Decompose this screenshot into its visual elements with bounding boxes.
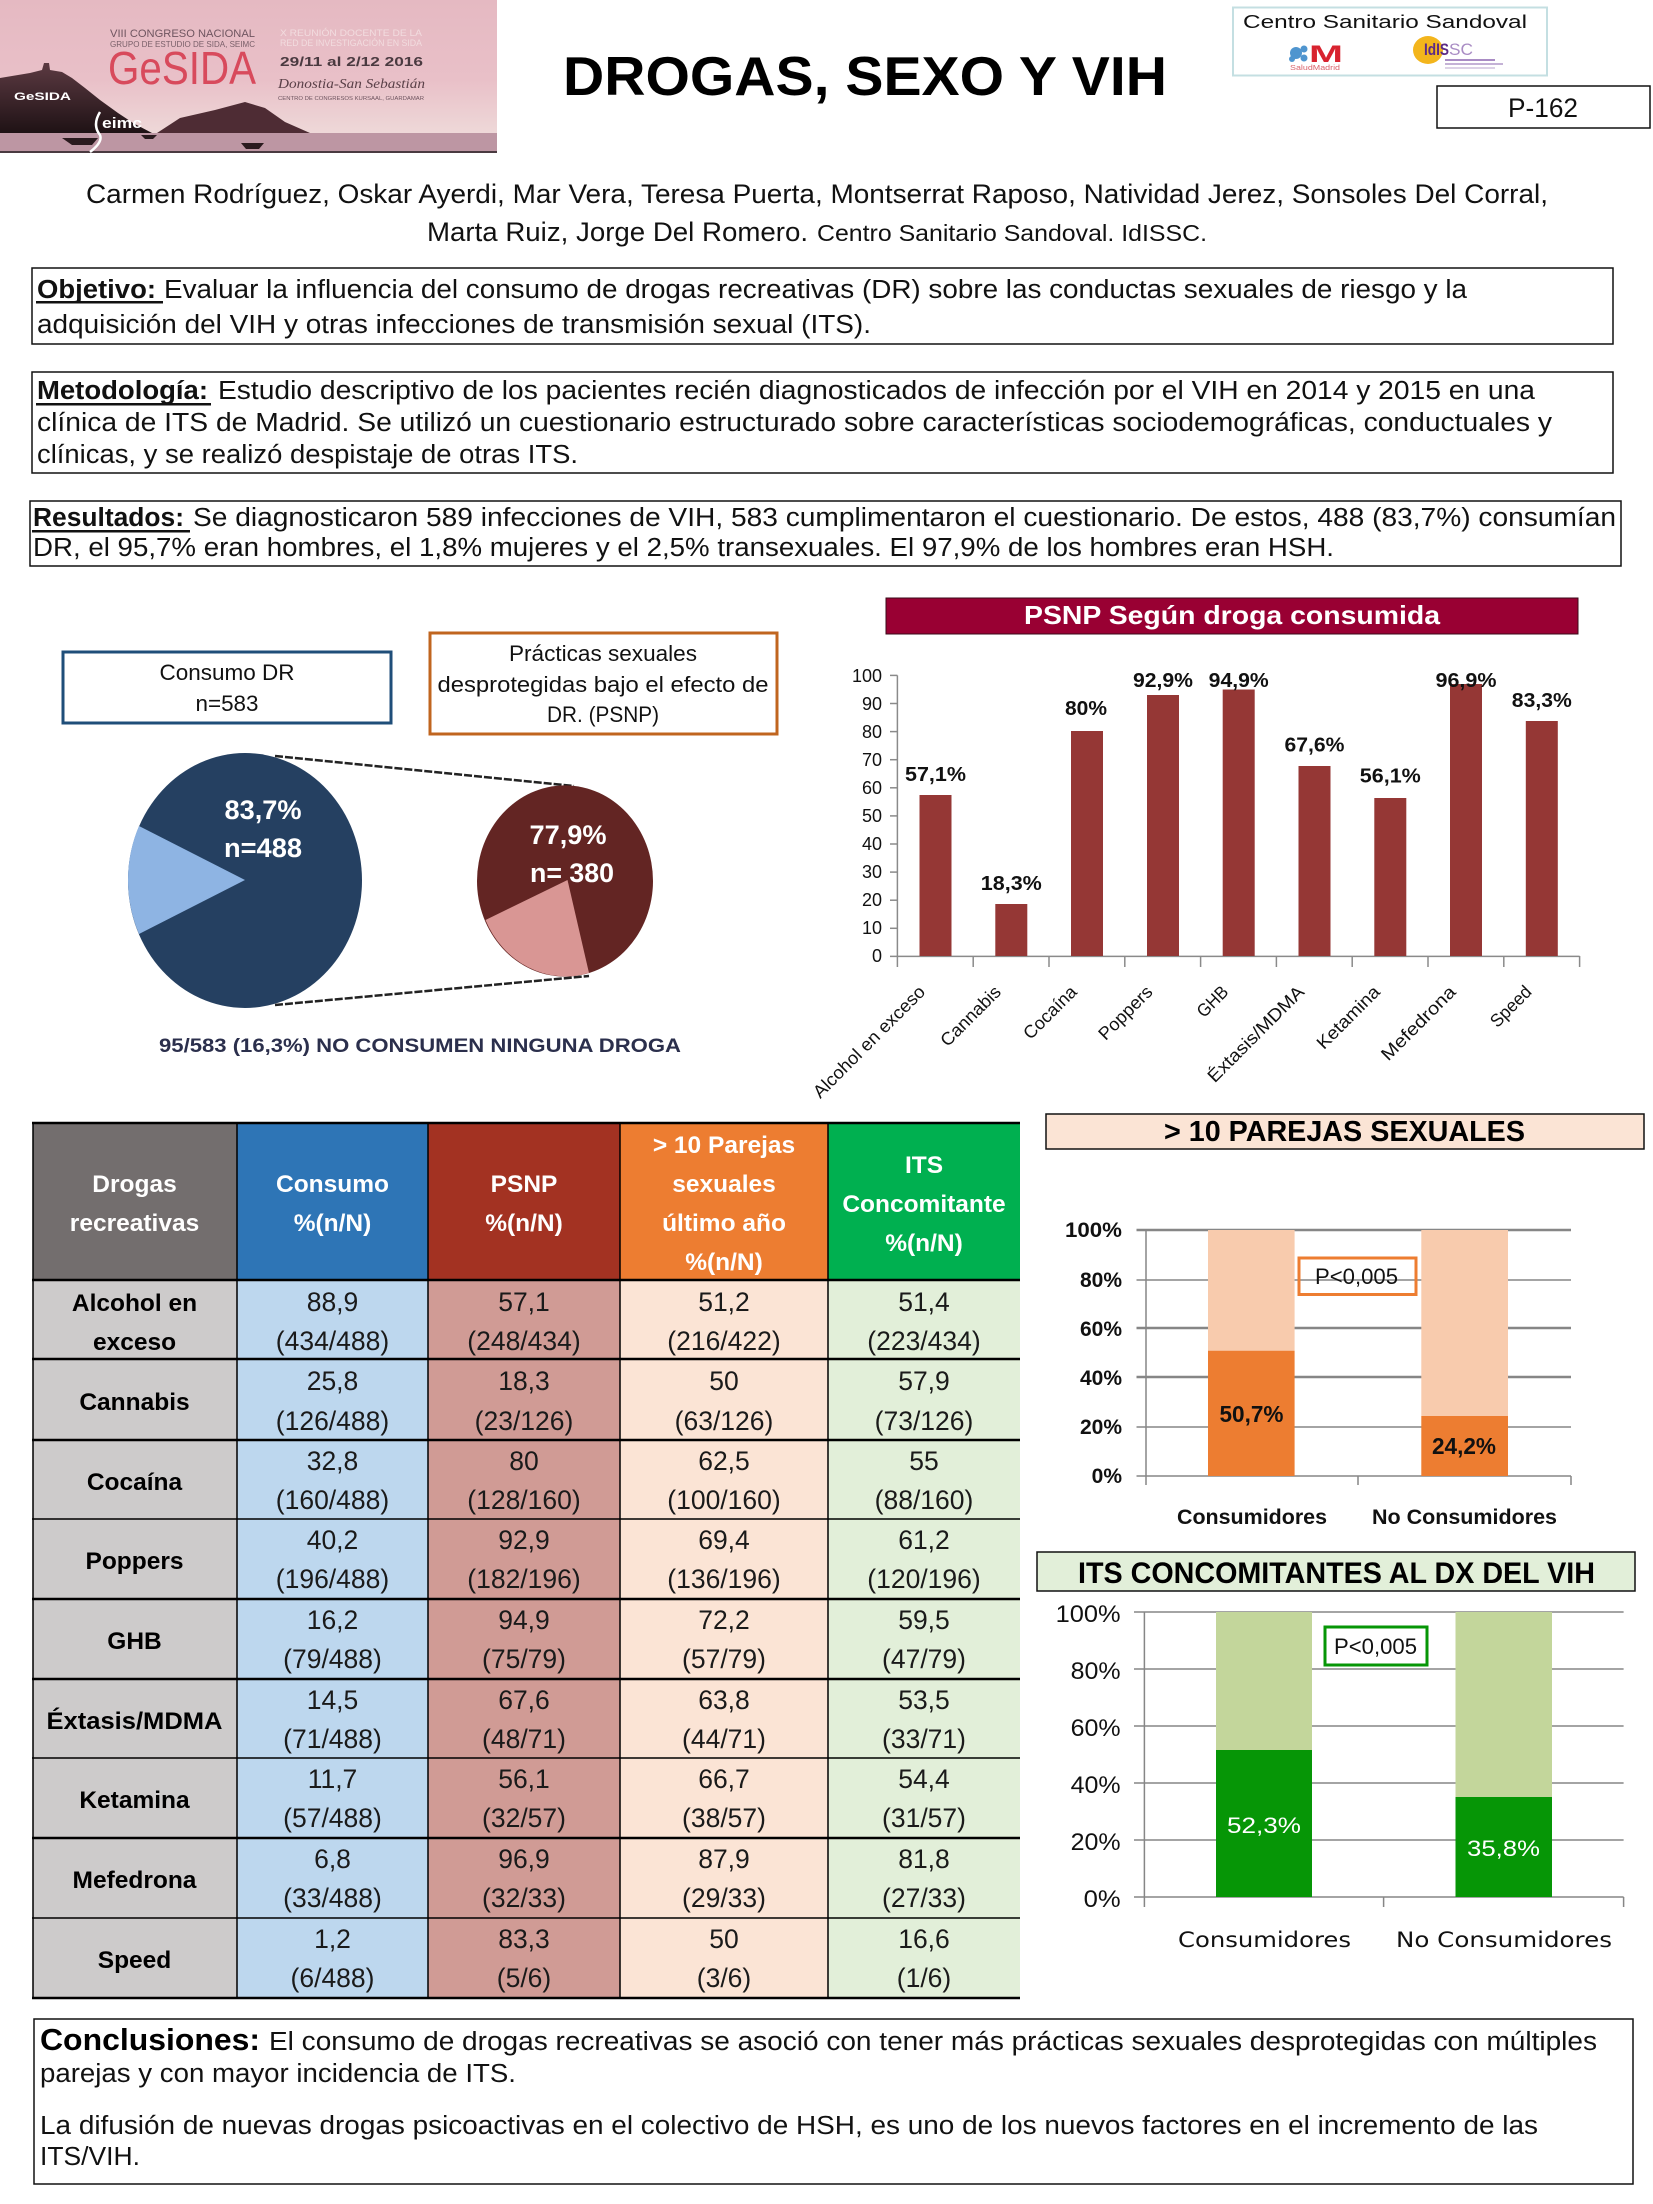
heading: ITS concomitantes: ITS CONCOMITANTES AL DX DEL VIH	[1078, 1557, 1595, 1590]
row: speed: (5/6)	[497, 1963, 551, 1993]
panel: resultados: Se diagnosticaron 589 infecciones de VIH, 583 cumplimentaron el cuestionario. De estos, 488 (83,7%) consumían	[193, 504, 1616, 532]
bar: consumidores	[1216, 1612, 1312, 1897]
category labels: Cannabis	[936, 982, 1005, 1050]
row: cannabis: Cannabis	[79, 1389, 190, 1416]
stacked bar chart: ITS	[1056, 1601, 1624, 1952]
row: mefedrona: (29/33)	[682, 1883, 766, 1913]
y axis labels: 40%	[1080, 1367, 1122, 1390]
panel: resultados	[30, 501, 1621, 566]
congress banner: RED DE INVESTIGACIÓN EN SIDA	[280, 38, 422, 48]
category labels: Consumidores	[1178, 1928, 1351, 1952]
table header: Concomitante	[842, 1191, 1006, 1218]
y axis: 90	[862, 694, 882, 714]
row: alcohol	[72, 1287, 981, 1356]
table header: Consumo	[276, 1171, 389, 1198]
row: speed: 16,6	[898, 1924, 950, 1954]
panel: metodologia: clínicas, y se realizó despistaje de otras ITS.	[37, 441, 578, 469]
row: poppers: (136/196)	[667, 1564, 781, 1594]
institution logos box: M	[1309, 41, 1343, 68]
panel: objetivo: Evaluar la influencia del consumo de drogas recreativas (DR) sobre las conductas sexuales de riesgo y la	[164, 276, 1468, 304]
row: mefedrona: 87,9	[698, 1844, 750, 1874]
value labels: 94,9%	[1209, 670, 1269, 692]
panel: conclusiones: ITS/VIH.	[40, 2143, 140, 2171]
row: cannabis: 18,3	[498, 1366, 550, 1396]
row: cannabis: (73/126)	[875, 1406, 973, 1436]
p value box	[1325, 1627, 1427, 1665]
row: extasis: 63,8	[698, 1685, 750, 1715]
congress banner: GeSIDA	[108, 42, 256, 94]
row: ketamina: (38/57)	[682, 1803, 766, 1833]
row: ketamina	[79, 1764, 966, 1833]
row: alcohol: (248/434)	[467, 1326, 581, 1356]
data table	[32, 1123, 1020, 1998]
table header: PSNP	[491, 1171, 557, 1198]
value labels: 83,3%	[1512, 690, 1572, 712]
row: speed: Speed	[98, 1947, 171, 1974]
y axis labels: 60%	[1071, 1715, 1121, 1742]
row: ketamina: 11,7	[308, 1764, 357, 1794]
category labels	[1177, 1506, 1557, 1529]
congress banner: eimc	[102, 115, 142, 132]
row: cocaina: (100/160)	[667, 1485, 781, 1515]
stacked bar chart: parejas	[1065, 1219, 1571, 1529]
y axis: 40	[862, 834, 882, 854]
row: cocaina: 80	[509, 1446, 539, 1476]
category labels: GHB	[1193, 982, 1232, 1021]
row: poppers: 92,9	[498, 1525, 550, 1555]
y axis labels: 20%	[1071, 1829, 1121, 1856]
row: alcohol: (434/488)	[276, 1326, 389, 1356]
row: extasis: (71/488)	[283, 1724, 382, 1754]
category labels: Éxtasis/MDMA	[1203, 982, 1308, 1086]
row: alcohol: 51,4	[898, 1287, 950, 1317]
y axis: 100	[852, 666, 882, 686]
row: ketamina: (31/57)	[882, 1803, 966, 1833]
institution logos box: Centro Sanitario Sandoval	[1243, 12, 1527, 32]
main pie: 83,7%	[224, 795, 302, 825]
row: GHB: (75/79)	[482, 1644, 566, 1674]
x axis ticks	[973, 956, 1580, 967]
authors: Marta Ruiz, Jorge Del Romero.	[427, 217, 808, 247]
y axis: 50	[862, 806, 882, 826]
row: GHB: (47/79)	[882, 1644, 966, 1674]
panel: conclusiones: parejas y con mayor incidencia de ITS.	[40, 2060, 516, 2088]
row: cocaina: (128/160)	[467, 1485, 581, 1515]
bar: no consumidores	[1421, 1230, 1508, 1476]
p value box	[1299, 1258, 1416, 1294]
panel: conclusiones: Conclusiones:	[40, 2022, 260, 2057]
congress banner: CENTRO DE CONGRESOS KURSAAL, GUARDAMAR	[278, 96, 424, 102]
p value box: P<0,005	[1334, 1634, 1417, 1659]
row: extasis: 53,5	[898, 1685, 950, 1715]
y axis labels	[1065, 1219, 1122, 1488]
callout: PSNP: DR. (PSNP)	[547, 702, 659, 727]
table header: %(n/N)	[885, 1230, 963, 1257]
value labels: 56,1%	[1360, 766, 1421, 788]
congress banner: GeSIDA	[14, 91, 71, 103]
secondary pie: n= 380	[530, 858, 614, 888]
institution logos box: IdIS	[1424, 40, 1449, 59]
y axis: 20	[862, 890, 882, 910]
row: GHB: (79/488)	[283, 1644, 382, 1674]
callout: consumo DR: Consumo DR	[160, 660, 294, 685]
row: alcohol: exceso	[93, 1329, 176, 1356]
congress banner: 29/11 al 2/12 2016	[280, 54, 423, 69]
y axis labels: 60%	[1080, 1318, 1122, 1341]
table header: Drogas	[92, 1171, 177, 1198]
bars	[920, 684, 1558, 956]
heading: PSNP segun droga	[886, 598, 1578, 634]
callout: PSNP	[430, 633, 777, 734]
row: ketamina: (57/488)	[283, 1803, 382, 1833]
bar: no consumidores: 24,2%	[1432, 1433, 1496, 1459]
congress banner: X REUNIÓN DOCENTE DE LA	[280, 28, 422, 38]
category labels: Speed	[1486, 982, 1536, 1031]
row: mefedrona: 96,9	[498, 1844, 550, 1874]
category labels: Ketamina	[1313, 981, 1385, 1053]
main pie	[128, 753, 362, 1008]
table header: ITS	[905, 1152, 943, 1179]
y axis labels: 20%	[1080, 1416, 1122, 1439]
value labels: 80%	[1065, 698, 1107, 720]
y axis labels: 100%	[1056, 1601, 1121, 1628]
row: ketamina: (32/57)	[482, 1803, 566, 1833]
row: cannabis: (126/488)	[276, 1406, 389, 1436]
row: GHB: 16,2	[307, 1605, 358, 1635]
row: cannabis: 25,8	[307, 1366, 358, 1396]
row: mefedrona: (33/488)	[283, 1883, 382, 1913]
row: extasis: Éxtasis/MDMA	[46, 1707, 223, 1735]
panel: objetivo	[32, 268, 1613, 344]
y axis: 0	[872, 946, 882, 966]
category labels: No Consumidores	[1396, 1928, 1612, 1952]
row: poppers: 61,2	[898, 1525, 950, 1555]
panel: objetivo: Objetivo:	[37, 276, 156, 304]
bar chart: PSNP by drug	[809, 666, 1580, 1102]
table header: último año	[662, 1210, 786, 1237]
row: cocaina: 55	[909, 1446, 939, 1476]
row: GHB: 72,2	[698, 1605, 750, 1635]
institution logos box: SaludMadrid	[1290, 63, 1340, 72]
row: cannabis: (23/126)	[475, 1406, 573, 1436]
row: speed: 83,3	[498, 1924, 550, 1954]
row: mefedrona: (27/33)	[882, 1883, 966, 1913]
p value box: P<0,005	[1315, 1264, 1398, 1289]
row: mefedrona	[73, 1844, 966, 1913]
value labels: 96,9%	[1436, 670, 1497, 692]
bar: consumidores: 50,7%	[1220, 1401, 1284, 1427]
y axis labels: 80%	[1071, 1658, 1121, 1685]
row: extasis: (48/71)	[482, 1724, 566, 1754]
heading: PSNP segun droga: PSNP Según droga consumida	[1024, 600, 1441, 630]
connector lines	[275, 756, 589, 1005]
category labels: Consumidores	[1177, 1506, 1327, 1529]
y axis: 70	[862, 750, 882, 770]
row: poppers: 40,2	[307, 1525, 358, 1555]
y axis labels: 40%	[1071, 1772, 1121, 1799]
row: cannabis: (63/126)	[675, 1406, 773, 1436]
callout: PSNP: desprotegidas bajo el efecto de	[438, 672, 768, 697]
panel: metodologia: clínica de ITS de Madrid. Se utilizó un cuestionario estructurado sobre características sociodemográficas, conductuales y	[37, 409, 1552, 437]
y axis labels	[1056, 1601, 1121, 1913]
value labels	[905, 670, 1572, 895]
table header: %(n/N)	[485, 1210, 563, 1237]
row: GHB: (57/79)	[682, 1644, 766, 1674]
table header: > 10 Parejas	[653, 1132, 795, 1159]
row: alcohol: (223/434)	[867, 1326, 981, 1356]
y axis: 60	[862, 778, 882, 798]
main pie: n=488	[224, 833, 302, 863]
table header: sexuales	[672, 1171, 776, 1198]
value labels: 18,3%	[981, 873, 1042, 895]
row: GHB: 59,5	[898, 1605, 950, 1635]
row: cocaina: Cocaína	[87, 1469, 183, 1496]
row: cocaina: 32,8	[307, 1446, 358, 1476]
heading: mas de 10 parejas: > 10 PAREJAS SEXUALES	[1164, 1116, 1525, 1148]
bar: no consumidores	[1456, 1612, 1552, 1897]
y axis labels: 100%	[1065, 1219, 1122, 1242]
row: speed	[98, 1924, 951, 1993]
row: cannabis: 57,9	[898, 1366, 950, 1396]
panel: objetivo: adquisición del VIH y otras infecciones de transmisión sexual (ITS).	[37, 311, 871, 339]
y axis: 30	[862, 862, 882, 882]
row: ketamina: 56,1	[498, 1764, 550, 1794]
row: ketamina: 54,4	[898, 1764, 950, 1794]
row: alcohol: Alcohol en	[72, 1290, 197, 1317]
row: cocaina	[87, 1446, 973, 1515]
pie caption: 95/583 (16,3%) NO CONSUMEN NINGUNA DROGA	[159, 1036, 681, 1057]
category labels: Alcohol en exceso	[809, 982, 929, 1102]
value labels: 92,9%	[1133, 670, 1193, 692]
category labels: No Consumidores	[1372, 1506, 1557, 1529]
panel: resultados: DR, el 95,7% eran hombres, el 1,8% mujeres y el 2,5% transexuales. El 97,9% de los hombres eran HSH.	[33, 534, 1334, 562]
row: speed: (1/6)	[897, 1963, 951, 1993]
row: speed: (3/6)	[697, 1963, 751, 1993]
row: ketamina: 66,7	[698, 1764, 750, 1794]
row: extasis	[46, 1685, 966, 1754]
pie of pie chart	[128, 753, 653, 1008]
panel: conclusiones: El consumo de drogas recreativas se asoció con tener más prácticas sexuales desprotegidas con múltiples	[269, 2028, 1597, 2056]
row: poppers: (182/196)	[467, 1564, 581, 1594]
table header	[33, 1123, 1020, 1280]
category labels	[809, 981, 1536, 1102]
row: mefedrona: 81,8	[898, 1844, 950, 1874]
row: mefedrona: (32/33)	[482, 1883, 566, 1913]
poster number box	[1437, 86, 1650, 128]
category labels: Mefedrona	[1377, 981, 1461, 1064]
row: ketamina: Ketamina	[79, 1787, 190, 1814]
callout: consumo DR: n=583	[196, 691, 258, 716]
bar: no consumidores: 35,8%	[1467, 1836, 1540, 1861]
authors: Carmen Rodríguez, Oskar Ayerdi, Mar Vera, Teresa Puerta, Montserrat Raposo, Natividad Jerez, Sonsoles Del Corral,	[86, 179, 1548, 209]
panel: conclusiones: La difusión de nuevas drogas psicoactivas en el colectivo de HSH, es uno de los nuevos factores en el incremento de las	[40, 2112, 1538, 2140]
row: cocaina: (160/488)	[276, 1485, 389, 1515]
y axis: 10	[862, 918, 882, 938]
secondary pie	[477, 785, 653, 977]
callout: consumo DR	[63, 652, 391, 723]
row: alcohol: 88,9	[307, 1287, 358, 1317]
value labels: 67,6%	[1284, 734, 1345, 756]
row: cocaina: 62,5	[698, 1446, 750, 1476]
heading: mas de 10 parejas	[1046, 1114, 1644, 1149]
category labels: Cocaína	[1019, 981, 1081, 1043]
row: mefedrona: 6,8	[314, 1844, 351, 1874]
row: mefedrona: Mefedrona	[73, 1867, 197, 1894]
category labels	[1178, 1928, 1612, 1952]
row: poppers: Poppers	[85, 1548, 184, 1575]
authors: Centro Sanitario Sandoval. IdISSC.	[817, 220, 1207, 246]
congress banner: Donostia-San Sebastián	[277, 77, 425, 92]
title: DROGAS, SEXO Y VIH	[563, 45, 1167, 107]
table header: %(n/N)	[685, 1249, 763, 1276]
panel: metodologia	[32, 372, 1613, 473]
row: cocaina: (88/160)	[875, 1485, 973, 1515]
row: speed: 1,2	[314, 1924, 351, 1954]
y axis: 80	[862, 722, 882, 742]
row: alcohol: (216/422)	[667, 1326, 781, 1356]
row: speed: 50	[709, 1924, 739, 1954]
row: alcohol: 57,1	[498, 1287, 550, 1317]
table body backgrounds	[33, 1280, 1020, 1998]
row: poppers	[85, 1525, 981, 1594]
congress banner: GRUPO DE ESTUDIO DE SIDA, SEIMC	[110, 39, 255, 49]
congress banner: VIII CONGRESO NACIONAL	[110, 28, 255, 40]
row: extasis: 14,5	[307, 1685, 358, 1715]
row: extasis: (33/71)	[882, 1724, 966, 1754]
y axis labels: 0%	[1084, 1886, 1121, 1913]
row: GHB: 94,9	[498, 1605, 550, 1635]
institution logos box: SC	[1449, 40, 1473, 59]
row: GHB	[107, 1605, 966, 1674]
panel: resultados: Resultados:	[33, 504, 184, 532]
y axis	[852, 666, 1580, 967]
panel: metodologia: Estudio descriptivo de los pacientes recién diagnosticados de infección por el VIH en 2014 y 2015 en una	[218, 377, 1536, 405]
secondary pie: 77,9%	[530, 820, 606, 850]
row: cannabis: 50	[709, 1366, 739, 1396]
row: poppers: (120/196)	[867, 1564, 981, 1594]
bar: consumidores: 52,3%	[1227, 1813, 1301, 1838]
authors	[86, 179, 1548, 247]
institution logos box	[1233, 8, 1547, 76]
y axis labels: 80%	[1080, 1269, 1122, 1292]
row: cannabis	[79, 1366, 973, 1436]
row: extasis: (44/71)	[682, 1724, 766, 1754]
row: poppers: 69,4	[698, 1525, 750, 1555]
callout: PSNP: Prácticas sexuales	[509, 641, 697, 666]
table header: %(n/N)	[294, 1210, 371, 1237]
congress banner	[0, 0, 497, 153]
panel: conclusiones	[34, 2019, 1633, 2184]
bar: consumidores	[1208, 1230, 1295, 1476]
row: GHB: GHB	[107, 1628, 162, 1655]
y axis labels: 0%	[1092, 1465, 1122, 1488]
row: speed: (6/488)	[291, 1963, 374, 1993]
category labels: Poppers	[1094, 982, 1157, 1044]
panel: metodologia: Metodología:	[37, 377, 208, 405]
row: poppers: (196/488)	[276, 1564, 389, 1594]
row: extasis: 67,6	[498, 1685, 550, 1715]
table header: recreativas	[70, 1210, 199, 1237]
poster number box: P-162	[1508, 93, 1578, 123]
value labels: 57,1%	[905, 764, 966, 786]
row: alcohol: 51,2	[698, 1287, 750, 1317]
